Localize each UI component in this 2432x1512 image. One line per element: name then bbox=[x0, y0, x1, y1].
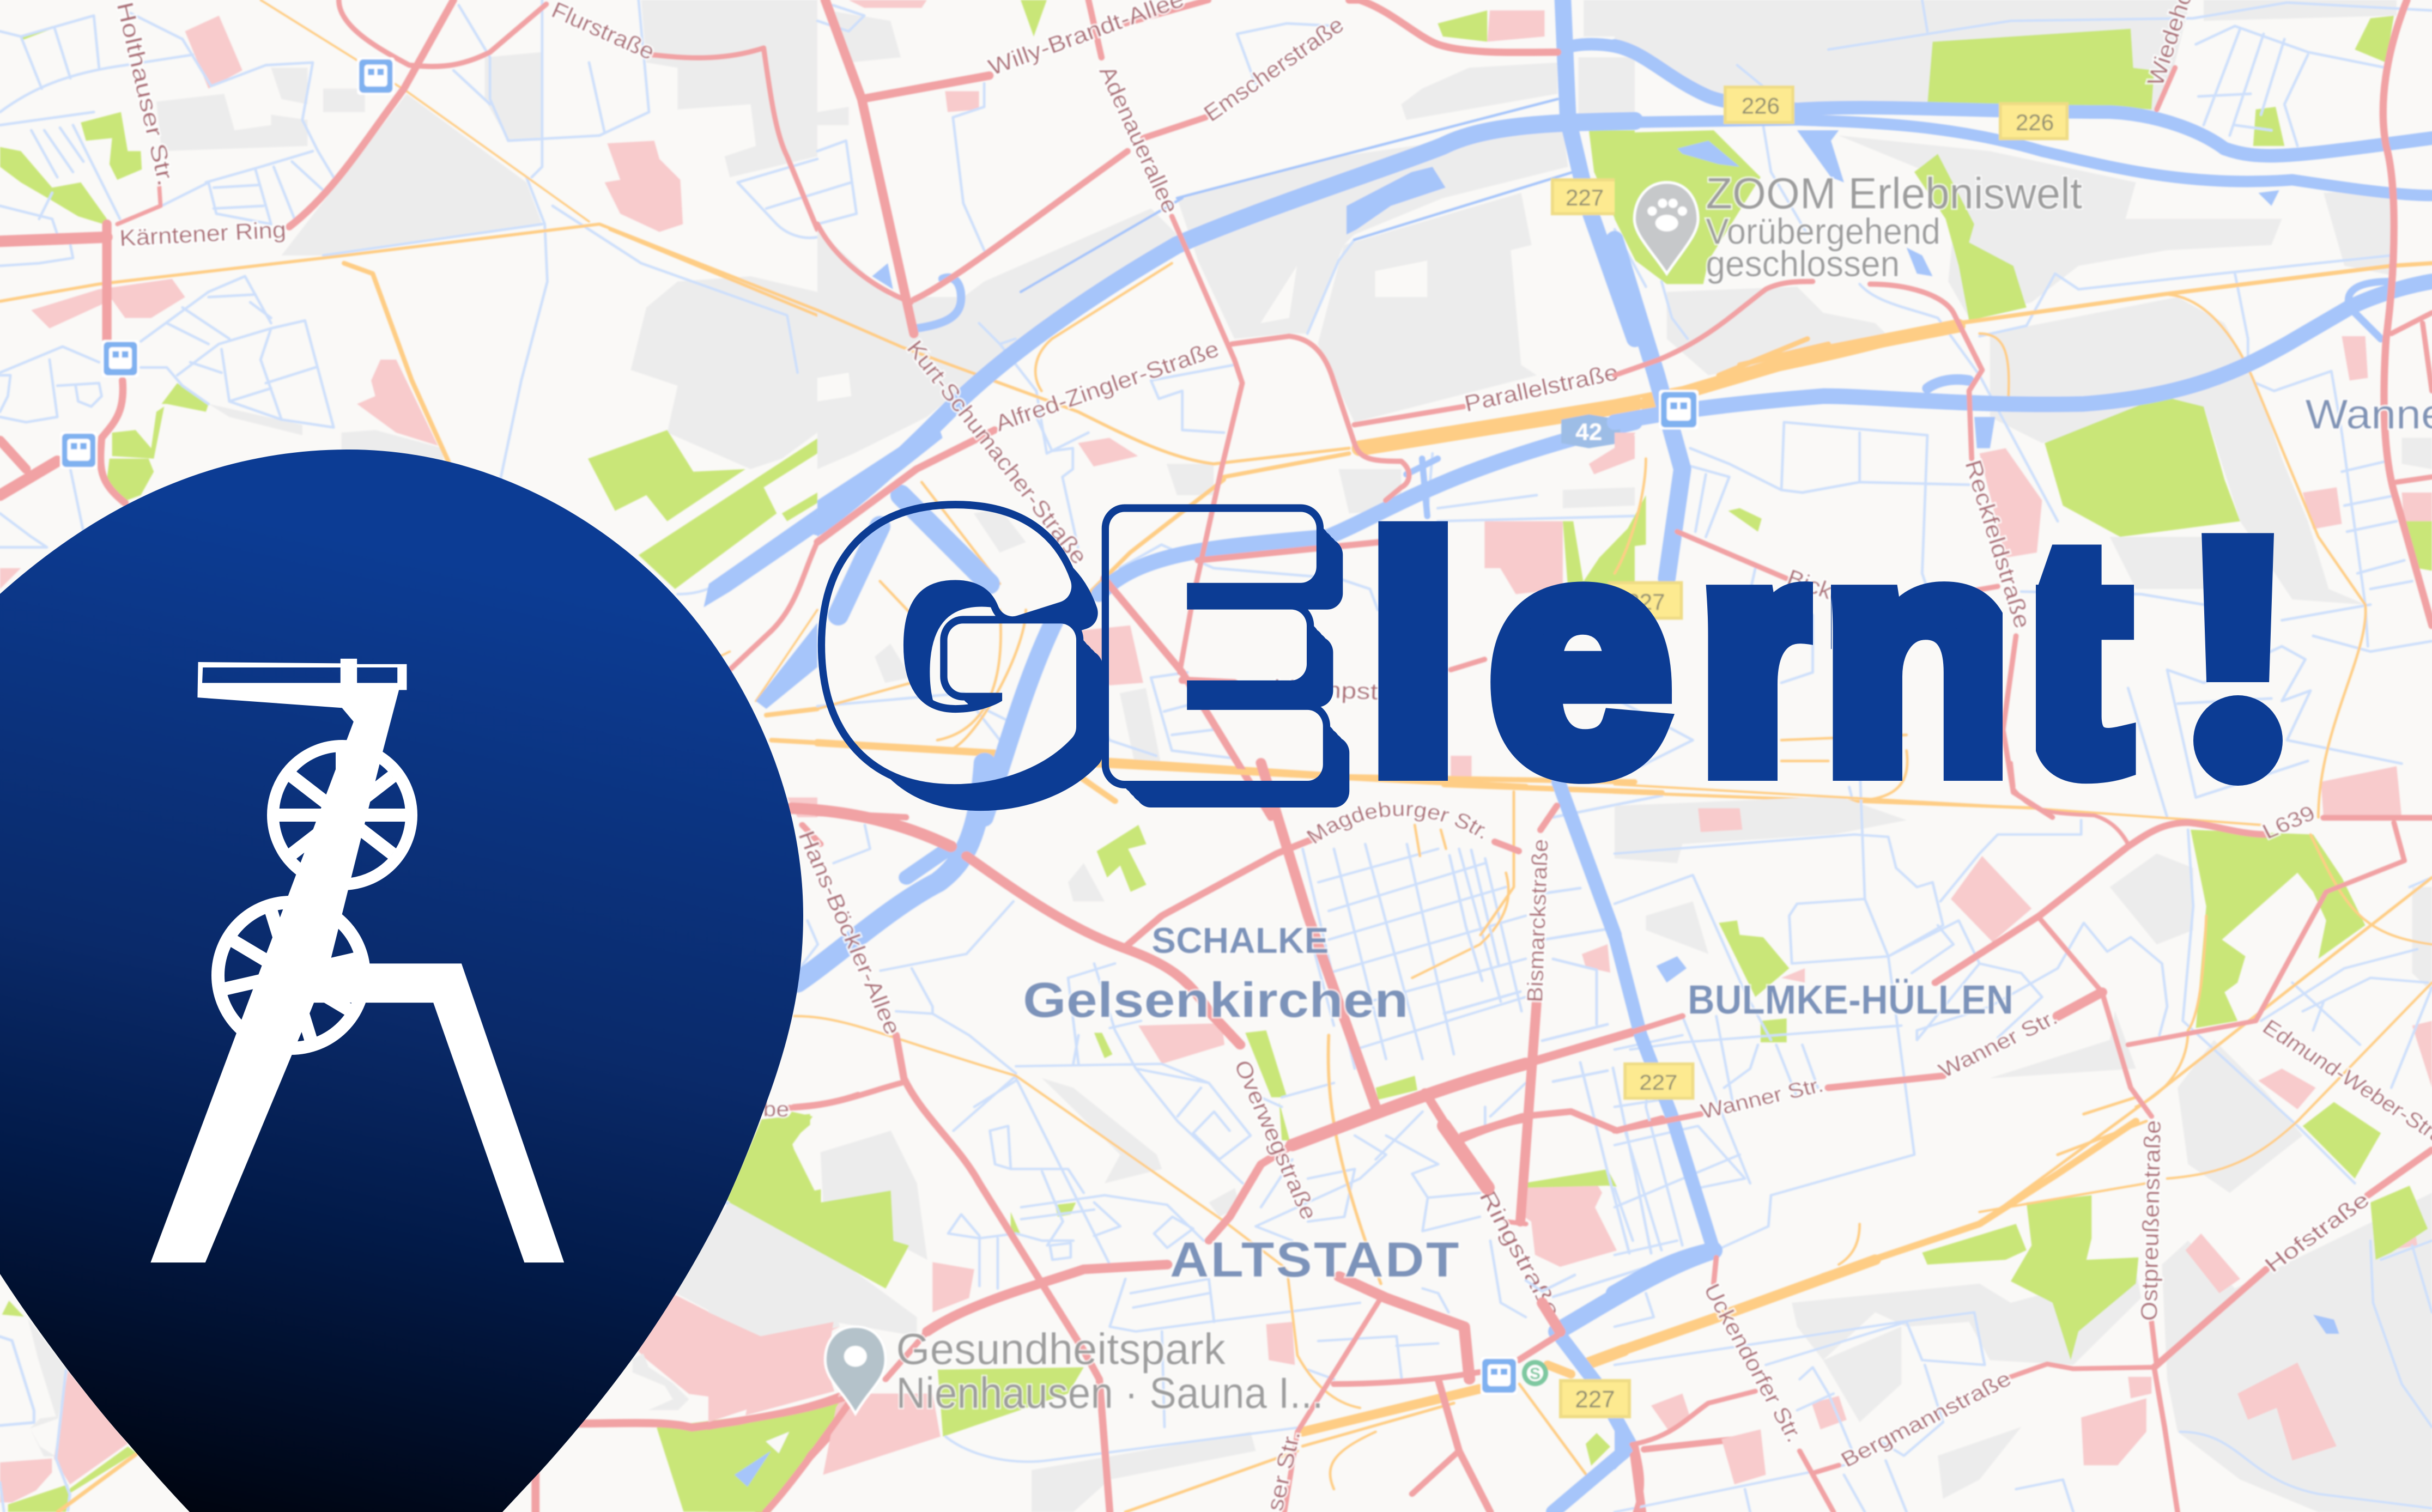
street label fragment: be bbox=[763, 1097, 789, 1121]
gray curve bbox=[633, 1353, 689, 1410]
district label: BULMKE-HÜLLEN: BULMKE-HÜLLEN bbox=[1688, 977, 2013, 1023]
main roads bbox=[792, 808, 951, 846]
headframe right leg bbox=[312, 963, 564, 1262]
railway lines bbox=[795, 825, 1508, 1489]
street label: Magdeburger Str.: Magdeburger Str. bbox=[1306, 801, 1485, 844]
road shield: 227: 227 bbox=[1566, 185, 1604, 210]
icon: mining headframe bbox=[150, 659, 564, 1262]
map tile: north-east bbox=[1609, 0, 2432, 817]
road shield: 42: 42 bbox=[1575, 418, 1602, 445]
white cut-outs in industrial areas bbox=[817, 260, 1427, 402]
gray block bbox=[676, 1205, 858, 1340]
icon: ZOOM map pin bbox=[1634, 183, 1698, 274]
place label: Gesundheitspark: Gesundheitspark bbox=[896, 1325, 1226, 1373]
street label: Hans-Böckler-Allee: Hans-Böckler-Allee bbox=[793, 827, 906, 1038]
road shield: 227 bbox=[1625, 1064, 1693, 1098]
canal and motorways bbox=[817, 121, 1635, 526]
ponds bbox=[1615, 956, 2339, 1470]
map pin with gradient bbox=[0, 450, 803, 1512]
title: GE outlined lettering bbox=[817, 501, 1349, 811]
industrial gray areas bbox=[1615, 796, 2432, 1512]
title: lernt! lettering bbox=[1378, 521, 2283, 786]
street label: Alfred-Zingler-Straße: Alfred-Zingler-Straße bbox=[992, 336, 1222, 436]
icon: S-Bahn: S bbox=[1530, 1365, 1541, 1383]
icon: Gesundheitspark map pin bbox=[825, 1327, 886, 1413]
road shield: 227: 227 bbox=[1575, 1386, 1615, 1413]
residential pink areas bbox=[0, 1370, 128, 1502]
icon: transit stop bbox=[60, 432, 98, 469]
railway lines bbox=[1444, 785, 1662, 793]
motorway A42 bbox=[1615, 282, 2432, 422]
city label: Gelsenkirchen: Gelsenkirchen bbox=[1023, 973, 1409, 1028]
street label: Emscherstraße: Emscherstraße bbox=[1199, 11, 1348, 126]
street label: Bergmannstraße: Bergmannstraße bbox=[1836, 1366, 2016, 1472]
road shield: 226: 226 bbox=[2016, 110, 2054, 135]
place label: Vorübergehend: Vorübergehend bbox=[1706, 211, 1940, 252]
motorway A227 bbox=[1615, 240, 1682, 579]
map tile: bottom-left corner bbox=[0, 1301, 136, 1512]
street label fragment: ser Str. bbox=[1262, 1429, 1305, 1512]
street label: Parallelstraße: Parallelstraße bbox=[1462, 359, 1621, 417]
minor streets bbox=[1615, 763, 2432, 1512]
parks bbox=[1719, 830, 2428, 1360]
icon: S-Bahn bbox=[1522, 1360, 1548, 1386]
map gap strip: between south tiles bbox=[1444, 782, 1744, 1512]
road shield: 227 bbox=[1561, 1381, 1629, 1417]
street label: Adenauerallee: Adenauerallee bbox=[1094, 62, 1184, 217]
residential pink and park strip bbox=[1522, 944, 1617, 1466]
place label: Nienhausen Sauna: Nienhausen · Sauna I... bbox=[896, 1368, 1324, 1417]
street label: Reckfeldstraße: Reckfeldstraße bbox=[1960, 457, 2036, 631]
place label: geschlossen: geschlossen bbox=[1706, 244, 1900, 284]
place label: ZOOM Erlebniswelt: ZOOM Erlebniswelt bbox=[1706, 169, 2082, 218]
park bbox=[657, 1405, 842, 1512]
industrial gray areas bbox=[1615, 0, 2432, 605]
small pond in park bbox=[735, 1432, 789, 1487]
minor streets bbox=[817, 5, 1635, 758]
residential pink areas bbox=[848, 0, 1635, 782]
street label: Hochkampstraße fragment: hkampst bbox=[1273, 675, 1379, 705]
minor streets bbox=[0, 0, 817, 594]
icon: transit stop bbox=[1481, 1357, 1518, 1395]
thin street bbox=[727, 1203, 858, 1278]
street label: Kärntener Ring: Kärntener Ring bbox=[119, 217, 287, 251]
railway lines bbox=[1615, 263, 2432, 402]
road shield: 227: 227 bbox=[1627, 589, 1665, 615]
canal and ponds bbox=[1615, 46, 2432, 156]
main roads bbox=[1615, 818, 2432, 1131]
railway lines bbox=[0, 224, 817, 315]
road shield: 226: 226 bbox=[1742, 93, 1780, 119]
road shield: 227: 227 bbox=[1639, 1071, 1677, 1094]
motorway A227 bbox=[1553, 782, 1631, 1512]
main roads bbox=[2383, 0, 2432, 626]
icon: transit stop bbox=[1659, 390, 1699, 429]
exclamation dot bbox=[2193, 695, 2283, 786]
street label: Wanner Str.: Wanner Str. bbox=[1698, 1072, 1826, 1124]
map tile: south centre bbox=[708, 752, 1566, 1512]
map tile: south of pin bbox=[536, 1095, 858, 1512]
canal bbox=[703, 508, 817, 709]
motorway A227 bbox=[1615, 935, 1714, 1250]
district label: SCHALKE: SCHALKE bbox=[1151, 920, 1329, 961]
road shield: 226 bbox=[1725, 87, 1793, 123]
minor streets bbox=[0, 1337, 70, 1512]
industrial gray areas bbox=[817, 0, 1635, 766]
street label: Hofstraße: Hofstraße bbox=[2259, 1187, 2374, 1277]
street label: Overwegstraße: Overwegstraße bbox=[1229, 1056, 1323, 1223]
map tile: south-east bbox=[1615, 763, 2432, 1512]
minor streets bbox=[1615, 0, 2432, 817]
icon: transit stop bbox=[102, 340, 139, 378]
street label: Ostpreußenstraße: Ostpreußenstraße bbox=[2136, 1120, 2166, 1321]
street label: Bickern: Bickern bbox=[1784, 564, 1869, 616]
street label: Bismarckstraße: Bismarckstraße bbox=[1523, 839, 1552, 1003]
parks bbox=[1021, 0, 1635, 589]
residential pink areas bbox=[1651, 768, 2432, 1484]
pin shape bbox=[0, 450, 803, 1512]
street label: Wanner Str.: Wanner Str. bbox=[1934, 1005, 2061, 1082]
gray block bbox=[28, 1319, 68, 1456]
minor streets bbox=[1444, 796, 1662, 1297]
street label: Ringstraße: Ringstraße bbox=[1474, 1187, 1566, 1321]
residential pink area bbox=[638, 1294, 840, 1416]
icon: transit stop bbox=[357, 57, 395, 95]
canal bbox=[797, 763, 985, 982]
map tile: north-west bbox=[0, 0, 818, 817]
lernt! word: lernt! bbox=[1368, 475, 2292, 837]
main roads bbox=[825, 0, 914, 333]
industrial gray areas bbox=[156, 0, 817, 469]
road shield: 227 bbox=[1552, 180, 1617, 214]
district label: ALTSTADT: ALTSTADT bbox=[1170, 1232, 1459, 1288]
park bbox=[727, 1114, 858, 1270]
residential pink areas bbox=[708, 1023, 1295, 1475]
parks bbox=[708, 825, 1417, 1512]
headframe tower and top beam bbox=[150, 659, 407, 1262]
parks bbox=[2, 1301, 136, 1512]
minor streets bbox=[799, 825, 1526, 1462]
main roads bbox=[536, 1396, 848, 1512]
main roads bbox=[1444, 1031, 1635, 1088]
pond bbox=[733, 1426, 791, 1488]
railway lines bbox=[1615, 784, 2432, 1265]
residential pink areas bbox=[0, 16, 817, 817]
icon: upper winding wheel bbox=[273, 746, 411, 884]
road shield: 42 bbox=[1561, 414, 1620, 448]
railway line bbox=[58, 1454, 136, 1512]
industrial gray areas bbox=[708, 863, 1256, 1512]
railway lines bbox=[817, 310, 1349, 464]
street label: Holthauser Str.: Holthauser Str. bbox=[112, 0, 179, 188]
street label: Uckendorfer Str.: Uckendorfer Str. bbox=[1699, 1280, 1809, 1446]
road shield: 226 bbox=[2000, 104, 2067, 138]
main roads bbox=[117, 183, 161, 224]
street label: Kurt-Schumacher-Straße: Kurt-Schumacher-Straße bbox=[902, 336, 1093, 569]
parks bbox=[0, 26, 818, 589]
street label: L639: L639 bbox=[2258, 800, 2319, 843]
thin waterways bbox=[1021, 99, 1573, 292]
residential pink areas bbox=[1615, 336, 2432, 817]
parks bbox=[1615, 16, 2432, 570]
icon: lower winding wheel bbox=[218, 902, 364, 1048]
road shield: 227 bbox=[1609, 582, 1681, 618]
map tile: north centre bbox=[817, 0, 1635, 817]
place label: Wanne: Wanne bbox=[2305, 391, 2432, 438]
